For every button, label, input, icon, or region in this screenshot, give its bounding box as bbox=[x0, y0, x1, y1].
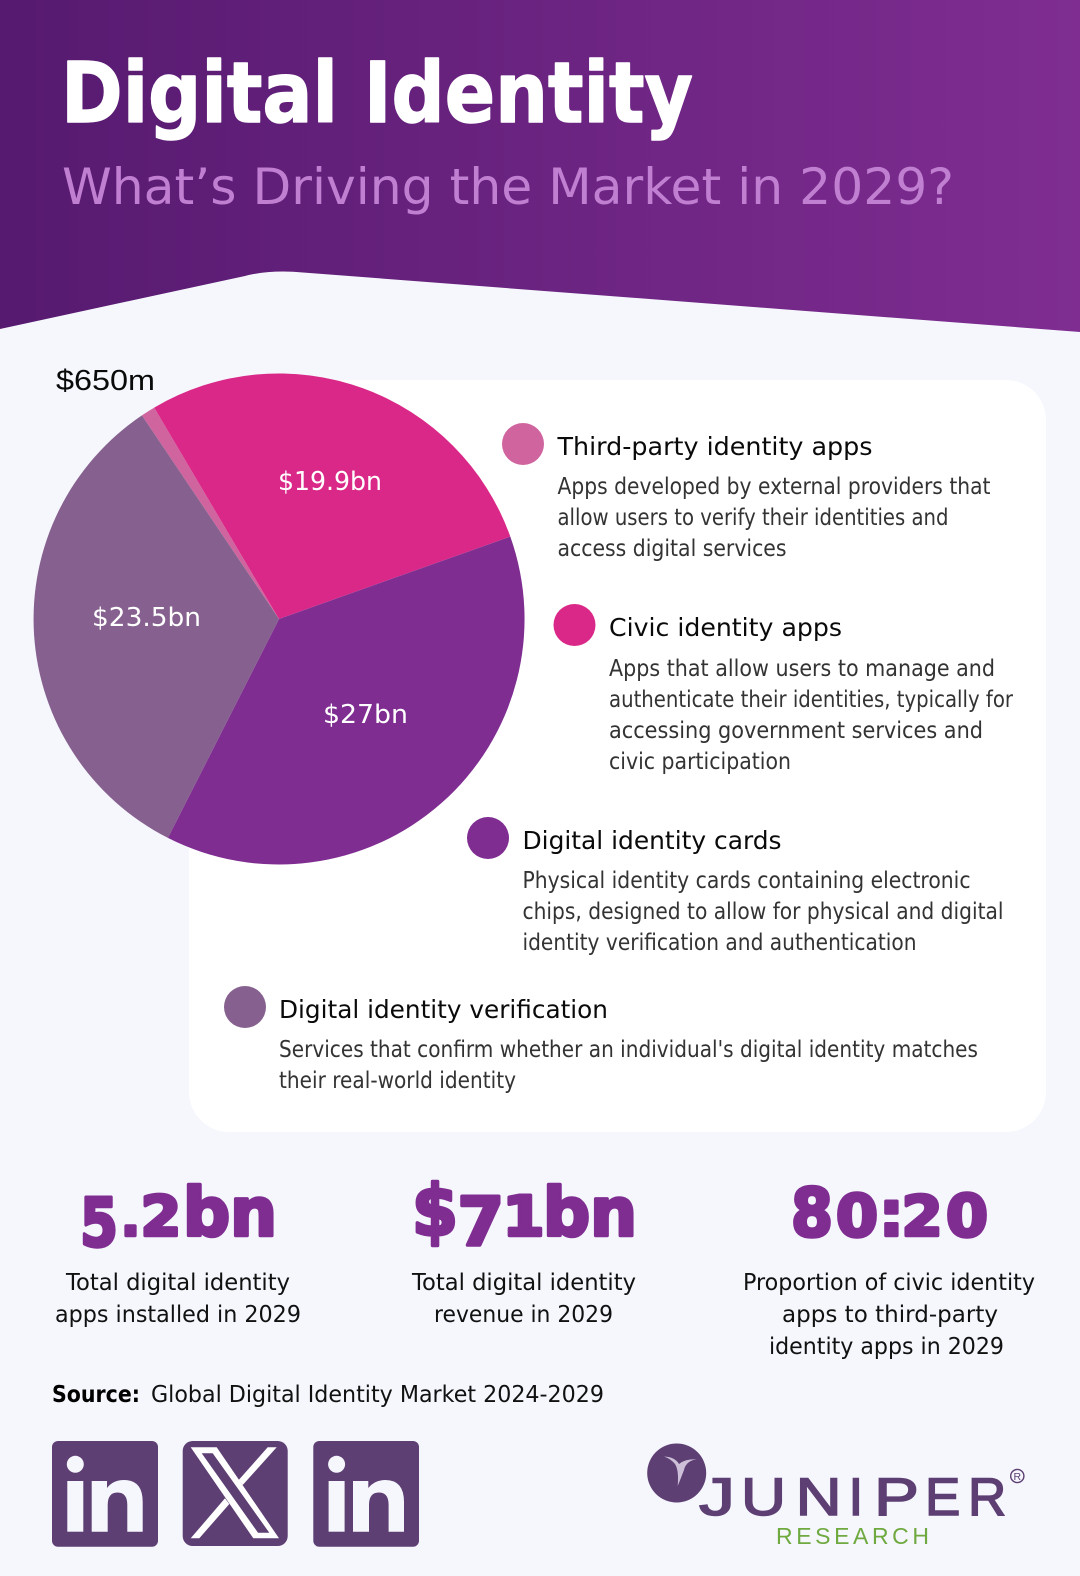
stat: revenue: 1 bbox=[502, 1184, 544, 1248]
stat: apps installed: Total digital identity bbox=[65, 1270, 290, 1296]
legend: digital identity cards bbox=[467, 817, 1004, 956]
stat: apps installed: . bbox=[121, 1190, 140, 1248]
stat: proportion: 0 bbox=[946, 1182, 988, 1250]
stat: proportion: 0 bbox=[836, 1182, 878, 1250]
stat: apps installed: apps installed in 2029 bbox=[55, 1302, 301, 1328]
stat: proportion: identity apps in 2029 bbox=[769, 1334, 1004, 1360]
logo: Juniper Research: N bbox=[796, 1468, 842, 1527]
subtitle: What’s Driving the Market in 2029? bbox=[62, 158, 954, 216]
legend: third-party identity apps: Apps developed by external providers that bbox=[558, 474, 990, 500]
legend: civic identity apps: authenticate their identities, typically for bbox=[609, 687, 1013, 713]
stat: apps installed: bn bbox=[183, 1174, 277, 1252]
stat: revenue: 7 bbox=[458, 1183, 504, 1261]
legend: digital identity verification: Digital identity verification bbox=[279, 995, 608, 1024]
logo: Juniper Research: R bbox=[1014, 1471, 1022, 1483]
logo: Juniper Research: I bbox=[848, 1468, 863, 1527]
legend: third-party identity apps bbox=[502, 423, 990, 562]
legend: civic identity apps: accessing government services and bbox=[609, 718, 983, 744]
stat: revenue: bn bbox=[543, 1174, 637, 1252]
stat: apps installed: 2 bbox=[141, 1184, 181, 1248]
legend: civic identity apps: Civic identity apps bbox=[609, 613, 842, 642]
logo: Juniper Research: R bbox=[968, 1468, 1006, 1527]
legend: digital identity cards: Digital identity cards bbox=[522, 826, 782, 855]
legend: civic identity apps: civic participation bbox=[609, 749, 791, 775]
legend: third-party identity apps: Third-party identity apps bbox=[556, 432, 872, 461]
pie label: verification: $23.5bn bbox=[92, 603, 201, 633]
legend: third-party identity apps: allow users to verify their identities and bbox=[558, 505, 948, 531]
legend: digital identity cards: identity verification and authentication bbox=[522, 930, 916, 956]
legend: third-party identity apps: access digital services bbox=[558, 536, 786, 562]
stat: apps installed: 5 bbox=[80, 1184, 118, 1262]
legend: digital identity cards: chips, designed to allow for physical and digital bbox=[522, 899, 1004, 925]
stat: revenue: revenue in 2029 bbox=[434, 1302, 613, 1328]
pie label: cards: $27bn bbox=[323, 700, 408, 730]
icon: linkedin bbox=[313, 1441, 419, 1547]
legend: civic identity apps: Apps that allow users to manage and bbox=[609, 656, 995, 682]
legend: civic identity apps bbox=[554, 604, 1013, 775]
title: Digital Identity bbox=[61, 44, 693, 142]
panel: legend card bbox=[189, 380, 1046, 1132]
stat: proportion: 8 bbox=[791, 1174, 833, 1252]
stat: proportion bbox=[743, 1174, 1035, 1360]
logo: Juniper Research: J bbox=[699, 1468, 735, 1527]
pie label: third-party: $650m bbox=[56, 365, 155, 397]
stat: proportion: Proportion of civic identity bbox=[743, 1270, 1035, 1296]
stat: proportion: apps to third-party bbox=[782, 1302, 998, 1328]
header banner bbox=[0, 0, 1080, 332]
stat: revenue bbox=[411, 1170, 637, 1328]
logo: Juniper Research: RESEARCH bbox=[776, 1523, 929, 1549]
source line: Source: bbox=[52, 1382, 140, 1408]
stat: revenue: $ bbox=[412, 1170, 458, 1252]
source line: Global Digital Identity Market 2024-2029 bbox=[151, 1382, 604, 1408]
logo: Juniper Research: E bbox=[925, 1468, 960, 1527]
icon: X bbox=[183, 1441, 288, 1546]
stat: revenue: Total digital identity bbox=[411, 1270, 636, 1296]
stat: proportion: 2 bbox=[902, 1184, 943, 1248]
logo: Juniper Research: P bbox=[874, 1468, 919, 1527]
pie label: civic: $19.9bn bbox=[278, 467, 382, 497]
legend: digital identity verification: their real-world identity bbox=[279, 1068, 516, 1094]
legend: digital identity verification: Services that confirm whether an individual's digital identity matches bbox=[279, 1037, 978, 1063]
logo: Juniper Research: U bbox=[741, 1468, 786, 1527]
pie chart bbox=[34, 365, 525, 864]
logo: Juniper Research bbox=[647, 1444, 1024, 1549]
legend: digital identity verification bbox=[224, 986, 978, 1094]
icon: linkedin bbox=[52, 1441, 158, 1547]
stat: proportion: : bbox=[879, 1178, 904, 1250]
stat: apps installed bbox=[55, 1174, 301, 1328]
legend: digital identity cards: Physical identity cards containing electronic bbox=[522, 868, 970, 894]
